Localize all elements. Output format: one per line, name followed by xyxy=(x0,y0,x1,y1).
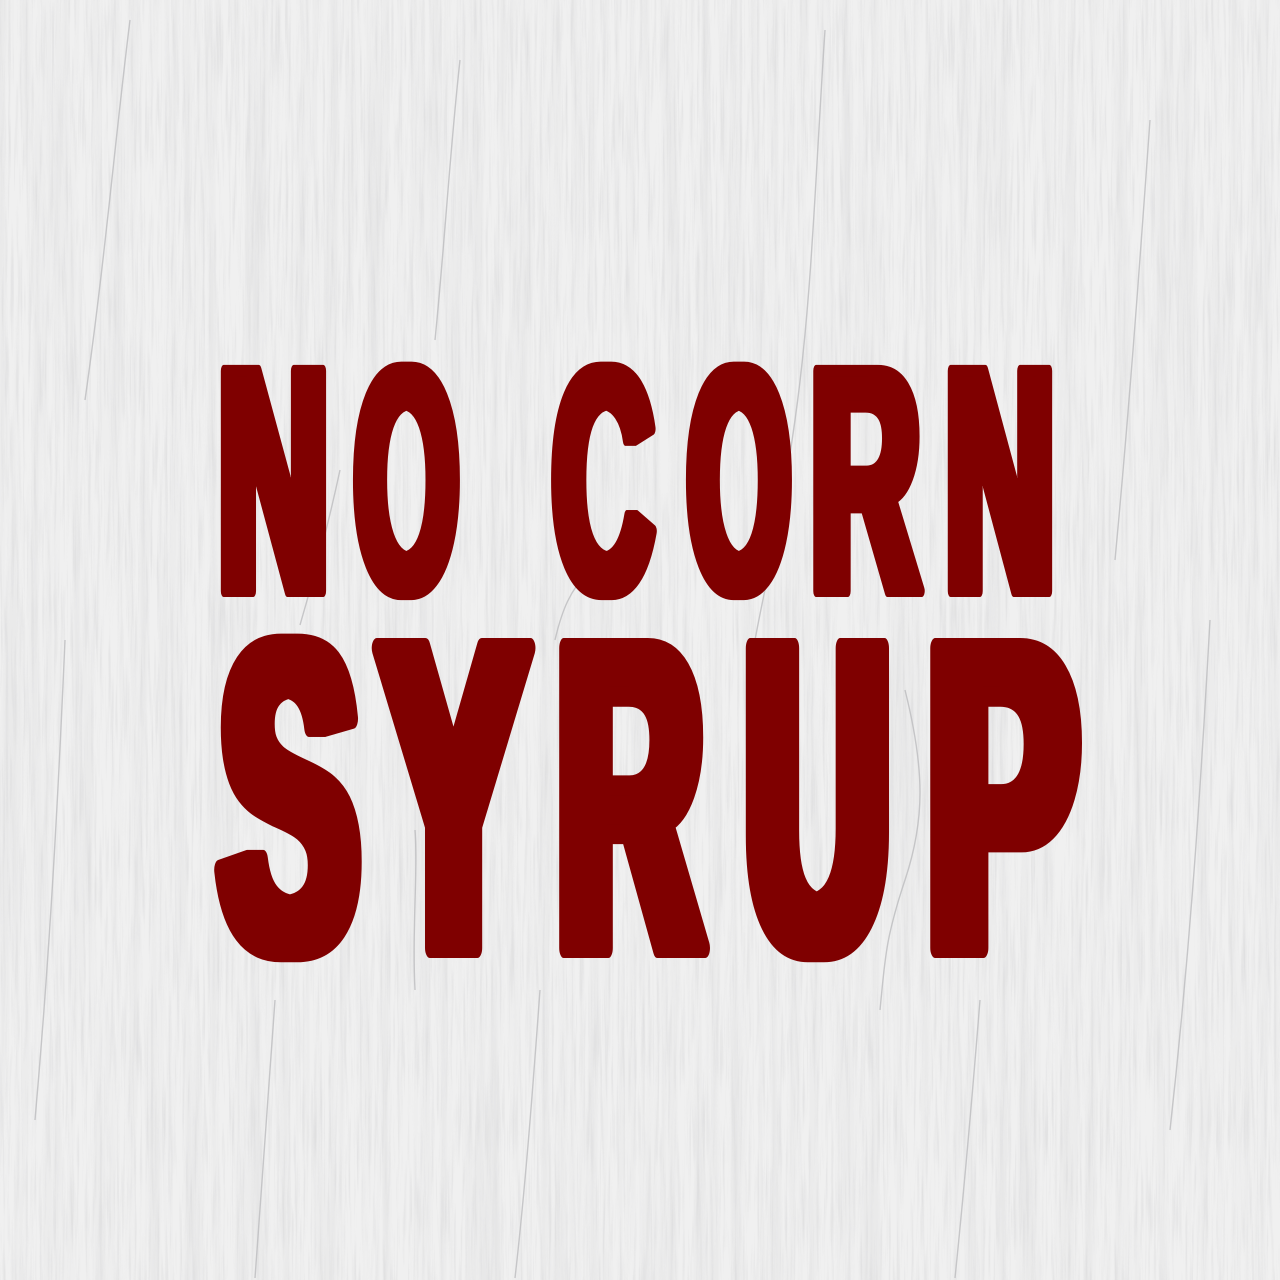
title line: SYRUP: P xyxy=(928,554,1076,1041)
title line: NO CORN: O xyxy=(688,301,790,659)
title line: NO CORN: C xyxy=(553,301,653,659)
title line: NO CORN: R xyxy=(811,301,920,659)
title line: NO CORN: N xyxy=(218,301,328,659)
title line: SYRUP: U xyxy=(746,554,888,1041)
title line: SYRUP: Y xyxy=(381,554,526,1041)
title line: SYRUP: S xyxy=(221,554,357,1041)
title line: NO CORN: O xyxy=(355,301,458,659)
title: NO CORN SYRUP: N xyxy=(946,301,1054,659)
title line: SYRUP: R xyxy=(558,554,702,1041)
title: NO CORN SYRUP xyxy=(218,301,1076,1041)
